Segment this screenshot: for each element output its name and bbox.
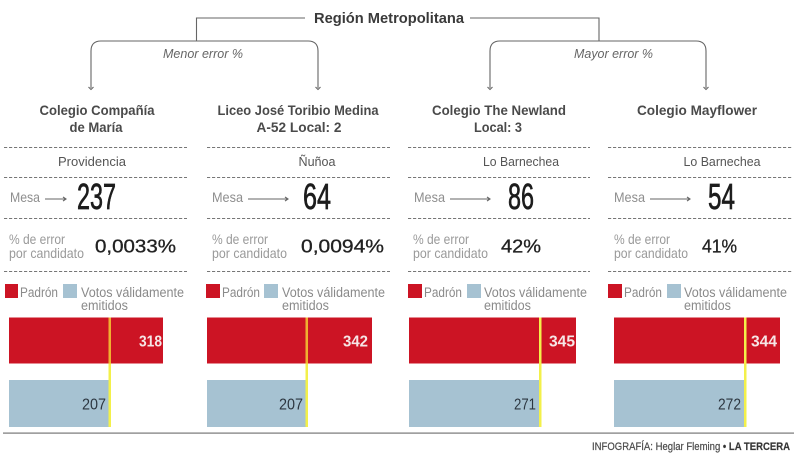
bar chart	[207, 318, 372, 427]
error label: % de error	[9, 231, 65, 247]
mesa number: 237	[77, 176, 116, 217]
bar chart	[409, 318, 576, 427]
comuna: Providencia	[58, 154, 127, 169]
label: mayor error: Mayor error %	[574, 47, 653, 61]
legend: Votos válidamente	[484, 285, 587, 300]
bar chart: 272	[718, 396, 741, 414]
mesa label: Mesa	[10, 189, 40, 205]
legend: Votos válidamente	[684, 285, 787, 300]
error label: % de error	[614, 231, 670, 247]
bar chart: 207	[82, 396, 106, 414]
bar chart: 345	[549, 334, 575, 350]
legend	[608, 284, 787, 313]
bar chart: 318	[139, 334, 162, 350]
error label: % de error	[212, 231, 268, 247]
connector: mayor error	[470, 18, 708, 90]
error value: 0,0094%	[301, 236, 384, 256]
heading: Colegio Mayflower	[637, 103, 758, 118]
mesa number: 86	[508, 176, 534, 217]
comuna: Ñuñoa	[298, 154, 336, 169]
mesa number: 64	[303, 176, 331, 217]
panel: Colegio Compañía de María	[4, 103, 187, 427]
legend: Votos válidamente	[282, 285, 385, 300]
heading: Local: 3	[474, 120, 522, 135]
panel: Colegio The Newland	[408, 103, 590, 427]
mesa number: 54	[708, 176, 735, 217]
legend: emitidos	[282, 298, 329, 313]
connector: menor error	[88, 18, 320, 90]
legend	[408, 284, 587, 313]
bar chart: 207	[279, 396, 303, 414]
legend: emitidos	[684, 298, 731, 313]
comuna: Lo Barnechea	[684, 154, 761, 169]
legend	[5, 284, 184, 313]
legend: Padrón	[20, 285, 58, 300]
footer rule	[3, 432, 794, 434]
credit: INFOGRAFÍA: Heglar Fleming • LA TERCERA	[592, 440, 790, 453]
legend: emitidos	[81, 298, 128, 313]
panel: Liceo José Toribio Medina	[206, 103, 390, 427]
legend: Votos válidamente	[81, 285, 184, 300]
bar chart: 344	[751, 334, 777, 350]
error label: por candidato	[614, 245, 688, 261]
bar chart: 271	[514, 396, 536, 414]
legend: Padrón	[624, 285, 662, 300]
error label: por candidato	[413, 245, 488, 261]
error value: 42%	[501, 236, 541, 256]
bar chart: 342	[343, 334, 368, 350]
arrow	[650, 197, 690, 201]
error label: por candidato	[212, 245, 287, 261]
panel: Colegio Mayflower	[608, 103, 792, 427]
legend	[206, 284, 385, 313]
error label: % de error	[413, 231, 469, 247]
arrow	[248, 197, 288, 201]
mesa label: Mesa	[414, 189, 445, 205]
arrow	[45, 197, 66, 201]
error value: 0,0033%	[95, 236, 176, 256]
legend: emitidos	[484, 298, 531, 313]
error label: por candidato	[9, 245, 84, 261]
title: Región Metropolitana	[314, 10, 465, 27]
heading: Colegio The Newland	[432, 103, 566, 118]
bar chart	[9, 318, 163, 427]
legend: Padrón	[424, 285, 462, 300]
heading: Colegio Compañía	[40, 103, 155, 118]
bar chart	[614, 318, 780, 427]
heading: A-52 Local: 2	[256, 120, 342, 135]
mesa label: Mesa	[614, 189, 645, 205]
mesa label: Mesa	[212, 189, 243, 205]
heading: de María	[70, 120, 123, 135]
heading: Liceo José Toribio Medina	[218, 103, 379, 118]
comuna: Lo Barnechea	[483, 154, 560, 169]
label: menor error: Menor error %	[163, 47, 243, 61]
arrow	[450, 197, 490, 201]
error value: 41%	[702, 236, 737, 256]
legend: Padrón	[222, 285, 260, 300]
